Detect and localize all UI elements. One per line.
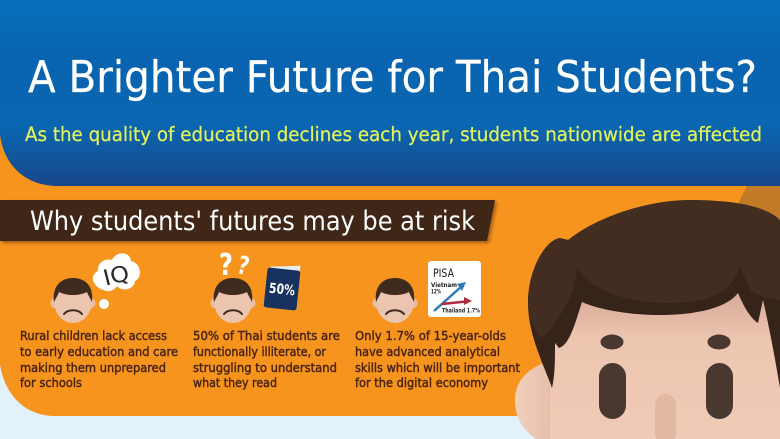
text: item 3: have advanced analytical — [355, 344, 500, 359]
icon: question marks — [219, 248, 252, 283]
text: item 1: making them unprepared — [20, 360, 166, 375]
eye right — [706, 363, 733, 419]
icon: IQ thought cloud: IQ — [101, 261, 132, 292]
character: large student face — [515, 200, 780, 439]
text: item 1: to early education and care — [20, 344, 178, 359]
text: item 2: struggling to understand — [193, 360, 337, 375]
brow left — [600, 334, 624, 350]
icon: IQ thought cloud — [93, 253, 140, 309]
icon: question marks: ? — [235, 250, 252, 281]
text: item 3: Only 1.7% of 15-year-olds — [355, 328, 506, 343]
icon: question marks: ? — [219, 248, 233, 283]
eye left — [599, 363, 626, 419]
panel: blue header — [0, 0, 780, 186]
darker orange corner — [690, 186, 780, 300]
item 3: analytical skills — [355, 261, 524, 390]
panel: orange — [0, 130, 780, 416]
icon: sad head 3 — [372, 278, 418, 323]
icon: PISA card: PISA — [433, 266, 454, 280]
text: item 3: for the digital economy — [355, 375, 489, 390]
hair main — [528, 200, 780, 338]
section banner: Why students' futures may be at risk — [30, 206, 475, 237]
ear — [515, 361, 551, 439]
face — [550, 270, 780, 439]
hair shadow layer — [528, 230, 780, 388]
text: item 1: Rural children lack access — [20, 328, 167, 343]
text: item 2: functionally illiterate, or — [193, 344, 327, 359]
icon: PISA card: 12% — [431, 288, 441, 296]
icon: book 50%: 50% — [268, 281, 296, 299]
nose — [655, 394, 676, 439]
item 2: illiteracy — [193, 248, 344, 390]
text: item 2: 50% of Thai students are — [193, 328, 340, 343]
text: item 1: for schools — [20, 375, 82, 390]
icon: PISA card: Thailand 1.7% — [442, 306, 480, 314]
text: item 2: what they read — [193, 375, 277, 390]
text: item 3: skills which will be important — [355, 360, 520, 375]
section banner — [0, 200, 495, 241]
icon: PISA card: Vietnam — [431, 281, 457, 289]
icon: sad head 2 — [210, 278, 256, 323]
icon: book 50% — [263, 262, 301, 311]
brow right — [708, 334, 730, 350]
item 1: rural children — [20, 253, 182, 390]
icon: PISA card — [428, 261, 481, 317]
icon: sad head 1 — [50, 278, 96, 323]
